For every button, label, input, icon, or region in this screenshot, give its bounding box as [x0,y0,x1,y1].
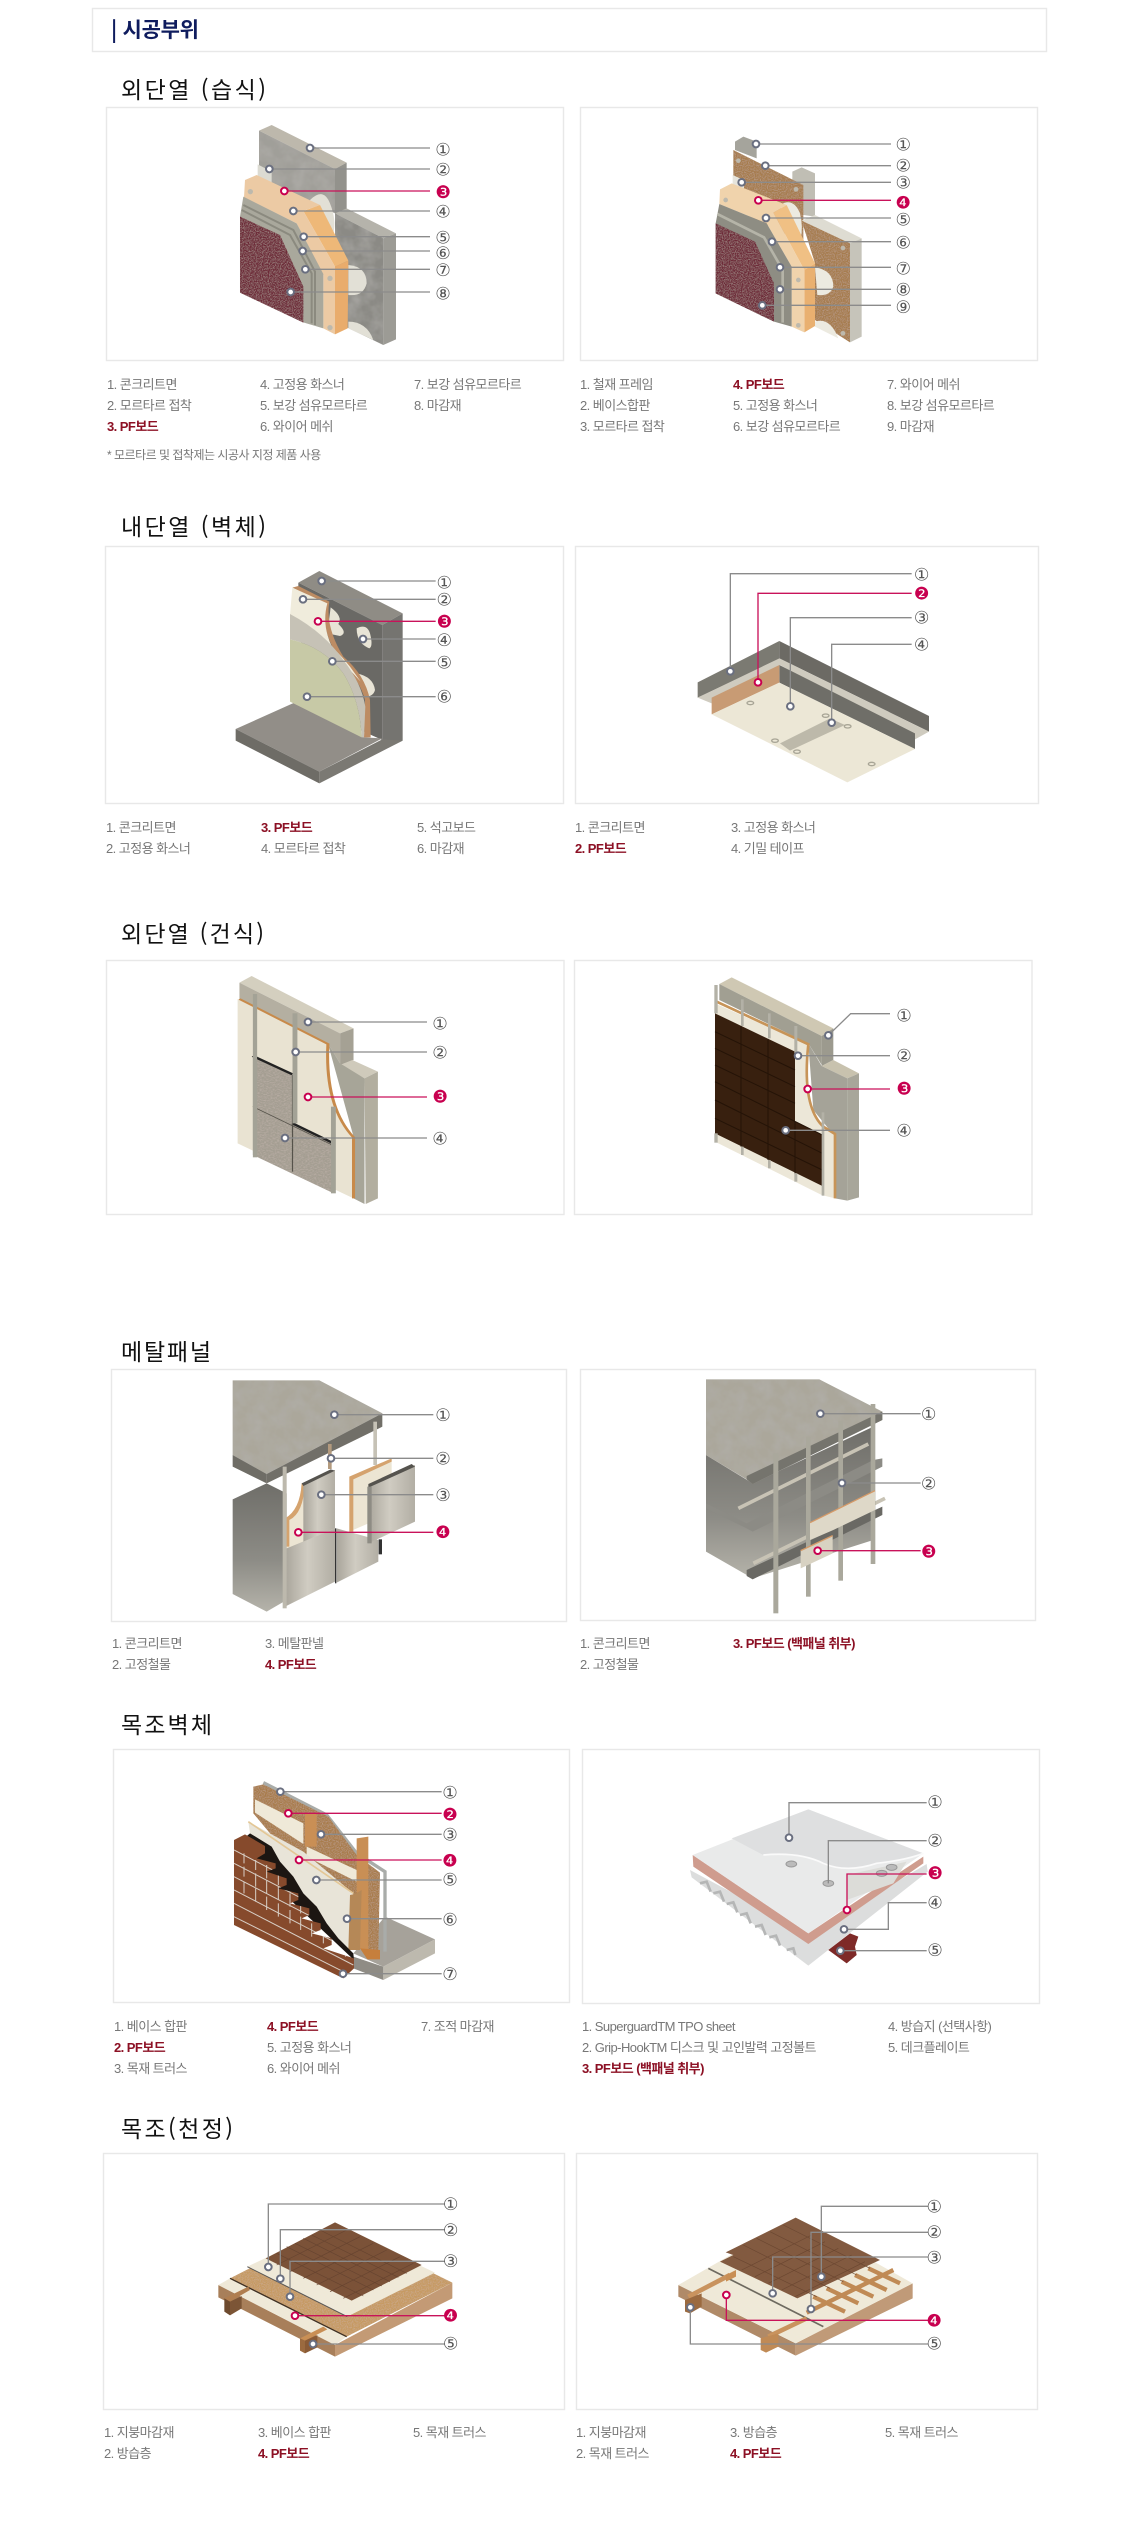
diagram: metal panel [233,1380,451,1612]
parts list: 2. 베이스합판 [580,398,650,413]
callout 6 [304,688,452,708]
callout 4: ④ [896,1122,912,1142]
panel: timber ceiling A [104,2154,564,2410]
callout 3 PF board: ❸ [437,612,452,632]
callout 3 PF board: ❸ [896,1080,912,1100]
callout 5: ⑤ [443,2334,458,2354]
callout 3: ③ [435,1486,451,1506]
callout 1: ① [435,141,451,161]
parts list: 2. 고정철물 [112,1657,171,1672]
callout 1: ① [432,1014,448,1034]
parts list: 4. PF보드 [267,2019,319,2034]
callout 6 [299,244,451,264]
parts list [106,820,476,856]
callout 1: ① [927,1793,943,1813]
callout 1: ① [437,573,452,593]
callout 5: ⑤ [896,210,911,230]
parts list: 4. PF보드 [730,2446,782,2461]
parts list: 5. 보강 섬유모르타르 [260,398,368,413]
callout 4 [282,1129,448,1149]
parts list: 3. PF보드 (백패널 취부) [733,1636,855,1651]
illustration [690,1809,928,1966]
callouts [282,1014,448,1149]
diagram: interior wall [236,571,452,783]
callout 1 [825,1006,912,1039]
callout 3 PF board [804,1080,912,1100]
parts list: 1. 콘크리트면 [575,820,645,835]
page title: | 시공부위 [111,14,199,44]
illustration [236,571,403,783]
callout 4 PF board: ❹ [442,1851,458,1871]
callout 8: ⑧ [435,285,451,305]
callout 4: ④ [914,635,929,655]
parts list [580,377,995,434]
page header [92,8,1046,52]
callout 1 [277,1784,458,1804]
callout 2 [277,2221,458,2282]
parts list [107,377,522,434]
parts list: 4. PF보드 [265,1657,317,1672]
panel: dry exterior tile [574,960,1032,1214]
parts list: 5. 고정용 화스너 [267,2040,351,2055]
callout 3 PF board: ❸ [921,1542,936,1562]
callout 7: ⑦ [435,261,451,281]
callout 3 PF board [281,183,451,203]
parts list: 5. 데크플레이트 [888,2040,970,2055]
callout 7 [340,1965,458,1985]
callout 5: ⑤ [927,1941,943,1961]
diagram: dark tile cladding [714,977,912,1201]
parts list: 2. PF보드 [575,841,627,856]
parts list: 4. 고정용 화스너 [260,377,344,392]
parts list: 2. 목재 트러스 [576,2446,650,2461]
callout 6 [344,1910,458,1930]
parts list: 7. 와이어 메쉬 [887,377,960,392]
parts list: 6. 와이어 메쉬 [267,2061,340,2076]
parts list: 8. 보강 섬유모르타르 [887,398,995,413]
callout 9 [759,298,911,318]
parts list: 1. 콘크리트면 [580,1636,650,1651]
callout 1 [786,1793,943,1841]
callout 2 [328,1450,451,1470]
parts list: 5. 목재 트러스 [413,2425,487,2440]
callout 4 PF board [723,2292,942,2331]
callout 7: ⑦ [442,1965,458,1985]
heading: 외단열 (건식) [121,915,264,949]
footnote: * 모르타르 및 접착제는 시공사 지정 제품 사용 [107,448,321,462]
parts list: 4. PF보드 [258,2446,310,2461]
callout 1 [818,2197,942,2280]
parts list: 9. 마감재 [887,419,934,434]
parts list: 3. 베이스 합판 [258,2425,332,2440]
callout 8 [777,280,911,300]
section: 외단열 (습식) [106,71,1038,462]
callout 1 [265,2195,458,2270]
callout 4: ④ [432,1129,448,1149]
section: 메탈패널 [112,1333,1036,1672]
parts list: 6. 보강 섬유모르타르 [733,419,841,434]
panel: timber ceiling B [576,2154,1038,2410]
panel: dry exterior stone [106,960,564,1214]
callout 3 PF board: ❸ [435,183,451,203]
callout 6: ⑥ [437,688,452,708]
callout 4 [828,635,929,726]
callout 1: ① [435,1406,451,1426]
callout 5: ⑤ [435,229,451,249]
illustration [240,125,396,345]
diagram: ceiling B [678,2197,942,2356]
diagram: concrete wall with PF board [240,125,451,345]
callout 9: ⑨ [896,298,911,318]
illustration [218,2222,452,2357]
illustration [234,1783,435,1980]
parts list: 6. 와이어 메쉬 [260,419,333,434]
callout 2 PF board: ❷ [442,1805,458,1825]
callout 3 PF board [814,1542,936,1562]
callout 3 [787,609,929,710]
callout 6: ⑥ [435,244,451,264]
callout 1 [331,1406,451,1426]
callout 4 PF board: ❹ [896,193,911,213]
callout 1: ① [896,136,911,156]
section: 외단열 (건식) [106,915,1032,1214]
callout 2 [839,1474,936,1494]
parts list: 1. 콘크리트면 [107,377,177,392]
callout 5 [837,1941,943,1961]
callout 2: ② [435,1450,451,1470]
callout 2 PF board: ❷ [914,585,929,605]
callout 6: ⑥ [442,1910,458,1930]
callout 5: ⑤ [927,2334,942,2354]
illustration: stone cladding [238,976,378,1204]
callout 5 [313,1871,458,1891]
callout 2 [795,1047,912,1067]
parts list: 1. 지붕마감재 [104,2425,174,2440]
parts list: 1. 베이스 합판 [114,2019,188,2034]
panel: timber wall with brick [114,1750,570,2002]
parts list: 2. 모르타르 접착 [107,398,192,413]
callout 5 [687,2304,942,2354]
callout 2: ② [437,591,452,611]
parts list: 1. 철재 프레임 [580,377,653,392]
panel: metal panel exploded [112,1370,566,1622]
callout 4 [841,1894,943,1933]
callout 2 [762,157,911,177]
callout 2: ② [927,2223,942,2243]
callout 3: ③ [442,1826,458,1846]
parts list: 4. 기밀 테이프 [731,841,805,856]
parts list: 4. 방습지 (선택사항) [888,2019,992,2034]
callout 4 PF board: ❹ [927,2311,942,2331]
parts list: 3. 메탈판넬 [265,1636,324,1651]
callout 4 PF board [295,1523,451,1543]
panel: metal panel back-side [580,1370,1036,1620]
callout 1: ① [896,1006,912,1026]
callout 3 PF board [844,1864,943,1913]
callout 8 [287,285,451,305]
callout 3 [318,1826,458,1846]
callout 2: ② [921,1474,936,1494]
callout 5: ⑤ [442,1871,458,1891]
parts list: 1. 지붕마감재 [576,2425,646,2440]
parts list: 2. 고정철물 [580,1657,639,1672]
diagram: ceiling A [218,2195,458,2357]
parts list: 5. 석고보드 [417,820,476,835]
callout 6: ⑥ [896,234,911,254]
callout 4 PF board [755,193,911,213]
callout 3 [287,2252,458,2300]
callout 5 [300,229,451,249]
heading: 목조벽체 [121,1706,212,1740]
parts list [104,2425,487,2461]
diagram: back panel [706,1379,936,1613]
callout 2: ② [896,1047,912,1067]
callout 3 PF board [305,1087,448,1107]
callout 3 [318,1486,451,1506]
callout 1 [305,1014,448,1034]
callout 2: ② [896,157,911,177]
callout 5 [763,210,911,230]
callout 4: ④ [437,631,452,651]
callout 4 PF board: ❹ [435,1523,451,1543]
callout 7 [302,261,451,281]
callout 4 PF board [296,1851,458,1871]
callout 1 [307,141,451,161]
heading: 외단열 (습식) [121,71,266,105]
parts list: 5. 고정용 화스너 [733,398,817,413]
parts list: 4. PF보드 [733,377,785,392]
callout 3 PF board: ❸ [432,1087,448,1107]
panel: interior insulation ceiling [576,546,1038,804]
parts list: 3. 방습층 [730,2425,778,2440]
callout 2 [828,1832,943,1883]
parts list: 4. 모르타르 접착 [261,841,346,856]
panel: wet exterior insulation on concrete [106,108,564,360]
parts list: 3. 목재 트러스 [114,2061,188,2076]
diagram: steel frame wall with PF board [716,136,911,342]
callout 2: ② [443,2221,458,2241]
parts list: 2. 고정용 화스너 [106,841,190,856]
illustration [714,977,859,1201]
callout 4 PF board [292,2307,458,2327]
parts list: 1. 콘크리트면 [112,1636,182,1651]
panel: wet exterior insulation on steel frame [580,108,1038,360]
callout 2 [266,160,451,180]
callout 5 [310,2334,458,2354]
callout 3 [769,2248,942,2297]
callout 1: ① [914,565,929,585]
callout 1 [753,136,911,156]
callout 4: ④ [435,202,451,222]
illustration [706,1379,885,1613]
callout 1 [817,1405,936,1425]
parts list: 7. 조적 마감재 [421,2019,494,2034]
parts list [112,1636,324,1672]
parts list: 2. 방습층 [104,2446,152,2461]
illustration [716,137,862,342]
callout 4 [290,202,451,222]
parts list [114,2019,494,2076]
parts list: 3. 고정용 화스너 [731,820,815,835]
parts list: 2. Grip-HookTM 디스크 및 고인발력 고정볼트 [582,2040,817,2055]
callout 1: ① [921,1405,936,1425]
callout 3 [738,174,911,194]
diagram: roof [690,1793,943,1966]
parts list: 6. 마감재 [417,841,464,856]
callout 3 PF board [315,612,452,632]
callout 7 [777,259,911,279]
diagram: timber wall [234,1783,458,1985]
panel: roof deck [582,1750,1040,2004]
callout 2: ② [432,1043,448,1063]
parts list: 3. PF보드 [107,419,159,434]
callout 2 [808,2223,942,2312]
section: 목조벽체 [114,1706,1040,2076]
callout 2 PF board [285,1805,458,1825]
callout 2: ② [435,160,451,180]
parts list: 3. PF보드 [261,820,313,835]
parts list [575,820,815,856]
heading: 메탈패널 [121,1333,211,1367]
diagram: ceiling [698,565,929,782]
heading: 목조(천정) [121,2110,233,2144]
callout 3: ③ [914,609,929,629]
callout 1: ① [442,1784,458,1804]
callout 3: ③ [896,174,911,194]
illustration [233,1380,415,1612]
callout 3 PF board: ❸ [927,1864,943,1884]
parts list: 1. 콘크리트면 [106,820,176,835]
callout 2 [300,591,452,611]
callout 2: ② [927,1832,943,1852]
callout 1 [727,565,929,675]
parts list: 5. 목재 트러스 [885,2425,959,2440]
parts list [576,2425,959,2461]
parts list: 2. PF보드 [114,2040,166,2055]
parts list: 7. 보강 섬유모르타르 [414,377,522,392]
callout 8: ⑧ [896,280,911,300]
section: 목조(천정) [104,2110,1038,2461]
callout 1 [318,573,452,593]
panel: interior insulation wall [106,546,564,804]
callout 3: ③ [927,2248,942,2268]
callout 1: ① [443,2195,458,2215]
parts list [582,2019,992,2076]
callout 4 PF board: ❹ [443,2307,458,2327]
callout 6 [769,234,911,254]
callout 3: ③ [443,2252,458,2272]
callout 7: ⑦ [896,259,911,279]
callout 1: ① [927,2197,942,2217]
parts list: 3. 모르타르 접착 [580,419,665,434]
heading: 내단열 (벽체) [121,508,266,542]
parts list: 8. 마감재 [414,398,461,413]
callout 2 PF board [755,585,929,686]
callout 2 [292,1043,448,1063]
callout 5: ⑤ [437,653,452,673]
parts list [580,1636,855,1672]
section: 내단열 (벽체) [106,508,1038,856]
illustration [698,641,929,782]
illustration [678,2218,913,2356]
callout 4: ④ [927,1894,943,1914]
callout 4 [782,1122,912,1142]
callout 5 [329,653,452,673]
parts list: 3. PF보드 (백패널 취부) [582,2061,704,2076]
parts list: 1. SuperguardTM TPO sheet [582,2019,736,2034]
callout 4 [360,631,452,651]
